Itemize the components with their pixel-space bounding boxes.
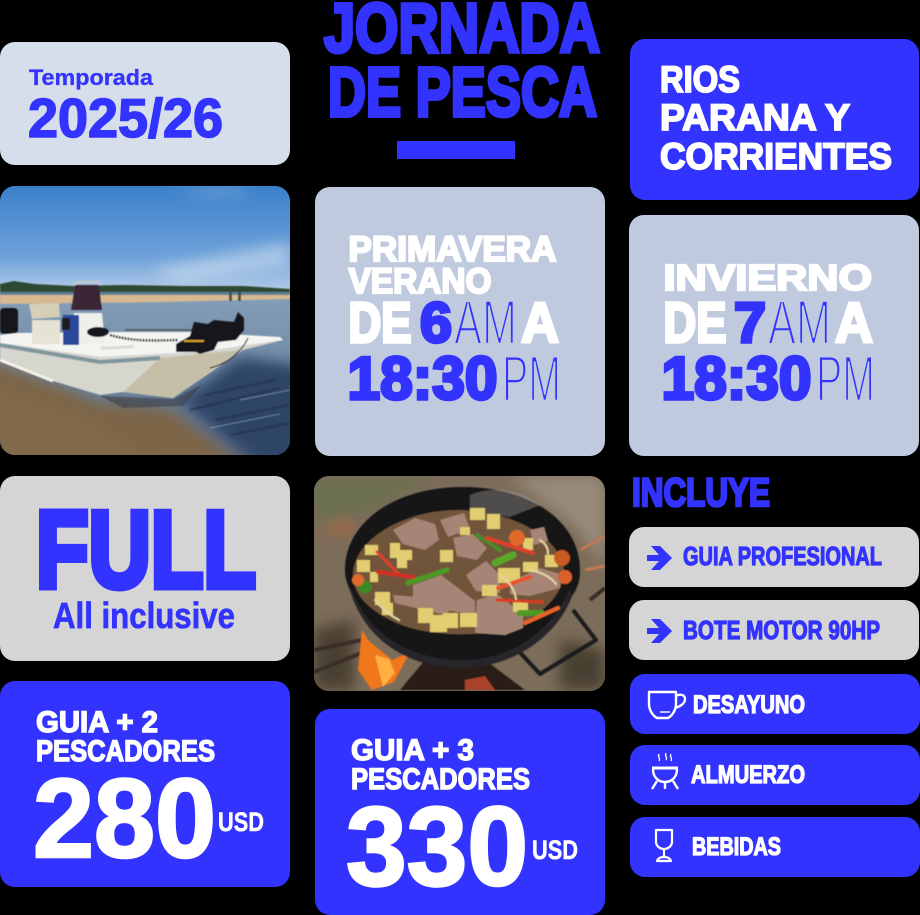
panel: spring summer hours: A <box>521 291 559 355</box>
title <box>324 0 600 131</box>
panel: spring summer hours: PM <box>502 342 561 415</box>
panel: price guide plus two: 280 <box>33 756 216 881</box>
icon: wine glass <box>656 830 672 861</box>
panel: price guide plus three: USD <box>532 835 578 865</box>
hull <box>0 340 283 398</box>
panel: full all inclusive: All inclusive <box>53 595 235 636</box>
icon: coffee cup <box>649 692 685 718</box>
panel: price guide plus two: GUIA + 2 <box>36 706 158 739</box>
deck <box>0 332 283 357</box>
hull shadow <box>100 384 203 408</box>
icon: arrow <box>647 619 672 643</box>
panel: winter hours: A <box>835 291 873 355</box>
fire <box>358 630 410 690</box>
panel: spring summer hours: PRIMAVERA <box>348 230 556 269</box>
label: Temporada: Temporada <box>29 65 154 90</box>
panel: winter hours: DE <box>664 291 726 355</box>
item: bote motor <box>629 600 919 660</box>
panel: rivers: PARANA Y <box>660 97 850 138</box>
panel: price guide plus two: USD <box>218 807 264 837</box>
title: DE PESCA <box>328 53 597 131</box>
item: bebidas: BEBIDAS <box>692 833 781 861</box>
panel: winter hours: AM <box>768 288 831 358</box>
panel: price guide plus three <box>315 709 605 915</box>
panel: temporada <box>0 42 290 165</box>
panel: rivers: CORRIENTES <box>660 136 892 177</box>
item: bebidas <box>630 817 920 877</box>
handle <box>513 610 596 674</box>
item: almuerzo: ALMUERZO <box>691 761 805 789</box>
panel: full all inclusive: FULL <box>36 489 256 611</box>
panel: winter hours: 7 <box>734 291 766 355</box>
icon: grill <box>652 753 678 789</box>
seat <box>29 303 60 319</box>
panel: price guide plus two <box>0 681 290 887</box>
season years: 2025/26 <box>28 87 223 149</box>
panel: price guide plus three: GUIA + 3 <box>351 734 474 767</box>
panel: rivers <box>630 39 919 200</box>
panel: price guide plus three: 330 <box>346 784 528 909</box>
title underline bar <box>397 141 515 159</box>
panel: winter hours: PM <box>816 342 875 415</box>
panel: spring summer hours: 18:30 <box>348 345 498 412</box>
panel: spring summer hours: 6 <box>420 291 452 355</box>
outboard motor <box>0 308 18 334</box>
photo: boat on the river <box>0 186 290 455</box>
item: almuerzo <box>630 745 920 805</box>
trolling motor <box>176 312 244 354</box>
panel: price guide plus two: PESCADORES <box>36 735 215 768</box>
item: guia profesional <box>629 527 919 587</box>
panel: winter hours: 18:30 <box>662 345 812 412</box>
panel: spring summer hours: DE <box>348 291 412 355</box>
panel: winter hours <box>629 215 919 456</box>
panel: spring summer hours: AM <box>454 288 517 358</box>
panel: rivers: RIOS <box>660 59 740 100</box>
smoke <box>470 490 540 517</box>
food <box>353 510 564 634</box>
panel: spring summer hours <box>315 187 605 456</box>
panel: price guide plus three: PESCADORES <box>351 763 530 796</box>
panel: winter hours: INVIERNO <box>664 257 872 298</box>
heading: incluye: INCLUYE <box>632 471 770 515</box>
panel: spring summer hours: VERANO <box>348 262 492 301</box>
item: desayuno <box>630 674 920 734</box>
pan body <box>345 487 580 668</box>
photo: stew in a pan over fire <box>314 476 605 691</box>
panel: full all inclusive <box>0 476 290 661</box>
console <box>71 285 102 310</box>
icon: arrow <box>647 546 672 570</box>
item: desayuno: DESAYUNO <box>693 691 805 719</box>
